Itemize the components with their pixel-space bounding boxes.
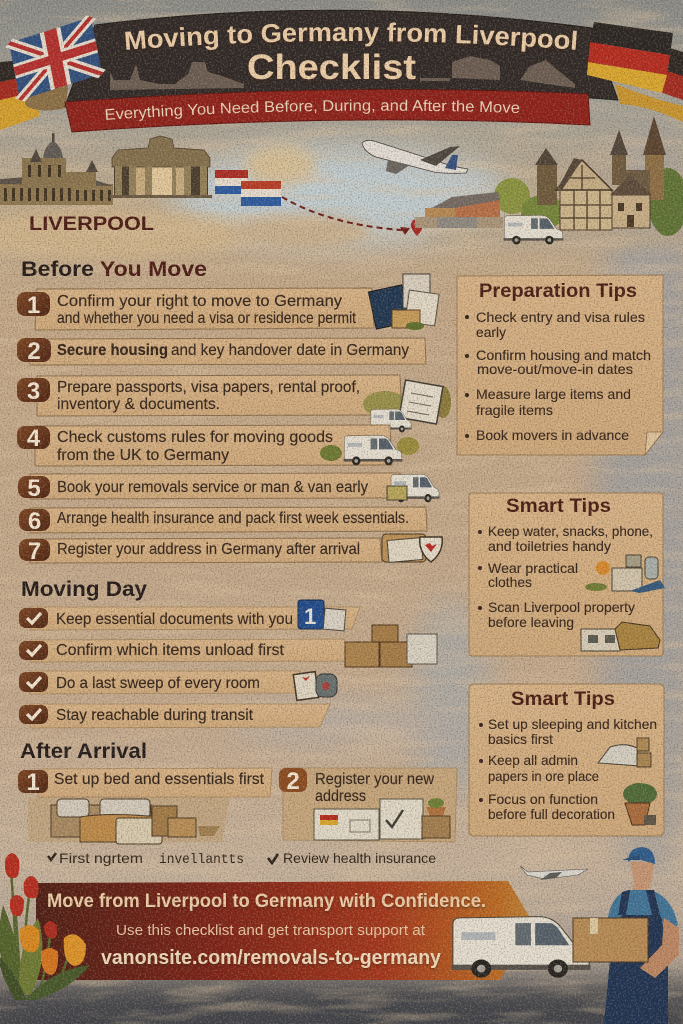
gate landmark (110, 136, 212, 198)
list (479, 716, 657, 822)
subtitle: Everything You Need Before, During, and After the Move (106, 100, 520, 121)
list: clothes (488, 574, 532, 590)
icon: checklist and car (363, 380, 451, 432)
icon: moving boxes and certificate (345, 625, 437, 667)
section: After Arrival (18, 740, 457, 844)
step 3: Prepare passports, visa papers, rental proof, (57, 379, 360, 396)
moving day item 2 (19, 625, 437, 667)
airplane (362, 140, 468, 174)
panel: smart tips after arrival (469, 684, 664, 836)
German town (415, 116, 683, 236)
title line: Moving to Germany from Liverpool (125, 22, 577, 54)
list: before leaving (488, 614, 574, 630)
step 3: 3 (27, 378, 40, 405)
moving day item 3: Do a last sweep of every room (56, 675, 260, 692)
list: fragile items (476, 402, 553, 418)
list (465, 309, 651, 443)
tulips (0, 853, 90, 1000)
step 1: and whether you need a visa or residence permit (57, 310, 356, 327)
route (282, 197, 423, 236)
step 7: 7 (28, 538, 41, 565)
heading: Smart Tips (511, 689, 615, 710)
UK flag (9, 17, 102, 100)
step 4 (17, 425, 419, 466)
step 7: Register your address in Germany after arrival (57, 541, 360, 558)
section: Before You Move (17, 258, 451, 565)
step 3: inventory & documents. (57, 396, 220, 413)
icon: pillow and boxes (598, 738, 651, 767)
small flags (215, 170, 281, 206)
heading: Moving Day (21, 578, 147, 601)
list: Confirm housing and match (476, 347, 651, 363)
step 1 (17, 274, 439, 330)
list: and toiletries handy (488, 538, 611, 554)
arrival panel 1: 1 (26, 769, 40, 796)
step 6 (19, 507, 427, 535)
moving day item 4: Stay reachable during transit (56, 707, 254, 724)
icon: travel essentials (585, 555, 665, 593)
list: Keep water, snacks, phone, (488, 523, 653, 539)
list (478, 523, 653, 630)
icon: documents (368, 274, 439, 330)
icon: registration papers (314, 798, 450, 840)
list: Measure large items and (476, 386, 631, 402)
small airplane (520, 866, 588, 880)
list: before full decoration (488, 806, 615, 822)
review item: first: First ngrtem (59, 850, 143, 866)
mover with box (573, 847, 679, 1024)
review item: second: invellantts (159, 852, 244, 868)
dark title band (65, 10, 618, 106)
icon: bed and boxes (51, 799, 220, 844)
Liverpool label: LIVERPOOL (29, 214, 154, 235)
section: Moving Day (19, 578, 437, 728)
step 5 (18, 473, 440, 502)
delivery van (504, 215, 563, 244)
icon: van with trees (320, 435, 419, 465)
review item: health insurance: Review health insurance (283, 850, 436, 866)
list: Focus on function (488, 791, 598, 807)
arrival panel 1 (18, 768, 272, 844)
CTA heading: Move from Liverpool to Germany with Confidence. (47, 890, 486, 912)
review row (48, 850, 436, 868)
list: move-out/move-in dates (477, 361, 633, 377)
list: Book movers in advance (476, 427, 629, 443)
CTA url: vanonsite.com/removals-to-germany (101, 947, 442, 969)
left flag tail (0, 60, 68, 130)
travel scene (0, 116, 683, 244)
step 3 (17, 375, 451, 432)
step 4: from the UK to Germany (57, 447, 229, 464)
icon: card and badge (293, 672, 337, 700)
list: Wear practical (488, 560, 578, 576)
red subtitle ribbon (65, 90, 590, 132)
heading: Preparation Tips (479, 281, 637, 302)
list: papers in ore place (488, 768, 599, 784)
list: Scan Liverpool property (488, 599, 635, 615)
step 5: 5 (27, 475, 41, 502)
arrival panel 2 (279, 768, 457, 842)
list: basics first (488, 731, 553, 747)
moving day item 4 (19, 704, 330, 728)
skyline silhouettes (110, 56, 575, 90)
arrival panel 2: address (315, 788, 366, 805)
icon: blue passport and card: 1 (304, 604, 316, 629)
step 1: Confirm your right to move to Germany (57, 293, 342, 310)
step 2: 2 (27, 338, 41, 365)
list: Set up sleeping and kitchen (488, 716, 657, 732)
list: Check entry and visa rules (476, 309, 645, 325)
arrival panel 2: 2 (286, 768, 300, 795)
panel: smart tips moving day (469, 493, 665, 656)
moving day item 1: Keep essential documents with you (56, 611, 293, 628)
moving day item 2: Confirm which items unload first (56, 642, 285, 659)
header banner (0, 10, 683, 132)
right flag tail (615, 45, 683, 122)
moving day item 1 (19, 600, 360, 631)
icon: ID card and shield (382, 534, 442, 562)
heading: After Arrival (20, 740, 147, 763)
panel: preparation tips (457, 275, 663, 455)
step 5: Book your removals service or man & van early (57, 479, 368, 496)
arrival panel 2: Register your new (315, 771, 434, 788)
icon: house (581, 622, 660, 651)
step 7 (19, 534, 442, 565)
step 2: and key handover date in Germany (171, 342, 409, 359)
step 4: 4 (27, 425, 41, 452)
call to action banner (36, 881, 532, 980)
icon: blue passport and card (298, 600, 346, 631)
step 4: Check customs rules for moving goods (57, 429, 333, 446)
icon: potted plant (623, 783, 657, 825)
Liverpool building (0, 133, 113, 205)
heading: Smart Tips (506, 496, 611, 517)
list: early (476, 324, 506, 340)
moving day item 3 (19, 671, 337, 700)
heading: Before You Move (21, 258, 207, 281)
icon: van with luggage (387, 474, 440, 502)
step 6: 6 (28, 508, 41, 535)
step 2 (17, 338, 426, 365)
checklist heading: Checklist (247, 48, 416, 87)
arrival panel 1: Set up bed and essentials first (54, 771, 265, 788)
large removals van (451, 917, 591, 978)
step 1: 1 (27, 292, 40, 319)
step 6: Arrange health insurance and pack first week essentials. (57, 510, 409, 527)
German flag (587, 22, 673, 93)
list: Keep all admin (488, 752, 578, 768)
step 2: Secure housing (57, 342, 168, 359)
CTA subtext: Use this checklist and get transport support at (116, 923, 425, 939)
